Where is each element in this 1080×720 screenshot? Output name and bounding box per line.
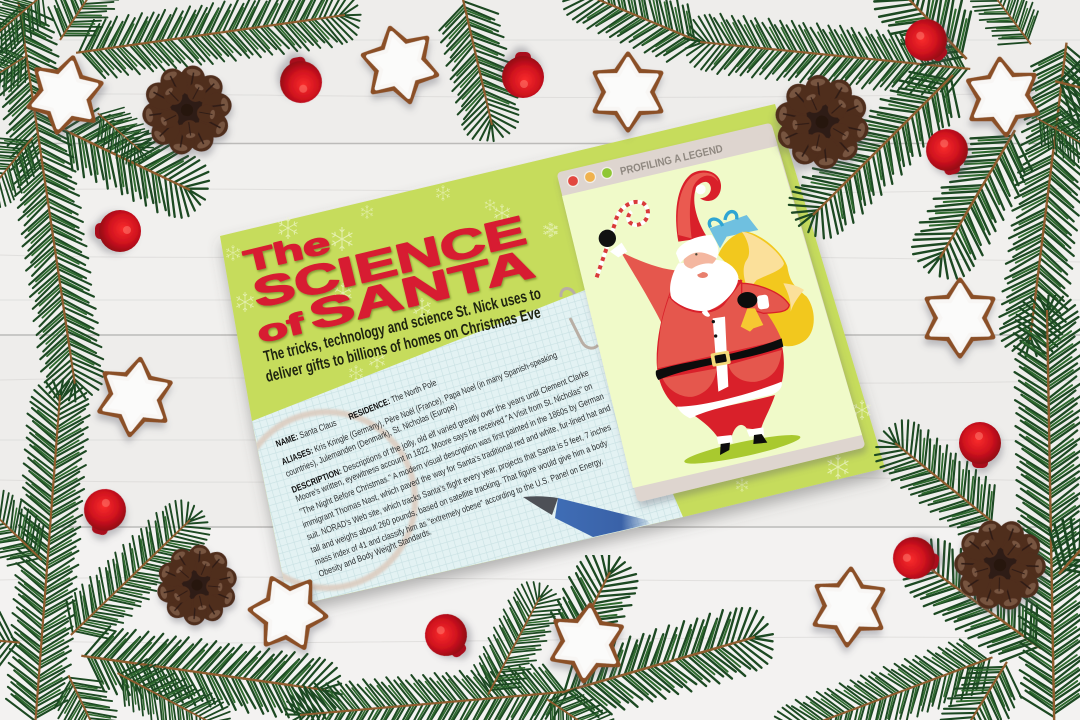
window heading: PROFILING A LEGEND <box>619 143 724 178</box>
profile text block: countries), Julemanden (Denmark), St. Nicholas (Europe) <box>284 401 458 479</box>
title: The <box>241 226 333 279</box>
panel: magazine page card <box>220 104 885 607</box>
window: profiling a legend <box>562 128 862 497</box>
fir branches: bottom left <box>0 370 350 720</box>
subtitle: The tricks, technology and science St. Nick uses to <box>262 285 543 366</box>
fir branches: bottom centre <box>285 555 785 720</box>
profile text block: "The Night Before Christmas." A modern visual description was first painted in the 1860s by German <box>298 391 605 517</box>
green page <box>220 104 885 607</box>
pen <box>523 496 650 537</box>
profile text block: mass index of 41 and classify him as "extremely obese" according to the U.S. Panel on Energy, <box>313 456 604 567</box>
belt and buckle <box>656 338 783 380</box>
cuff and mitten <box>599 230 627 257</box>
title: SCIENCE <box>248 207 530 317</box>
profile text block: NAME: Santa Claus <box>274 417 338 449</box>
coffee ring stain <box>239 412 415 588</box>
paperclip upper part <box>561 288 590 322</box>
profile text block: suit. NORAD's Web site, which tracks Santa's flight every year, projects that Santa is 5 feet, 7 inches <box>305 422 613 542</box>
body <box>657 272 784 418</box>
title: of <box>254 308 308 350</box>
raised arm <box>621 252 683 323</box>
profile text block: DESCRIPTION: Descriptions of the jolly, old elf varied greatly over the years until Clement Clarke <box>290 368 590 495</box>
fir branches: bottom right <box>765 295 1080 720</box>
profile text block: ALIASES: Kris Kringle (Germany), Père Noël (France), Papa Noel (in many Spanish-speaking <box>280 350 558 467</box>
window content area <box>562 146 862 488</box>
profile text block: Obesity and Body Weight Standards. <box>317 527 433 579</box>
subtitle: deliver gifts to billions of homes on Christmas Eve <box>264 304 542 386</box>
ground shadow <box>683 430 802 469</box>
toy sack <box>718 232 814 346</box>
profile text block: immigrant Thomas Nast, which paved the way for Santa's traditional red and white, fur-lined hat and <box>301 403 612 530</box>
paperclip lower part <box>570 318 598 348</box>
red baubles <box>78 10 1001 668</box>
title: SANTA <box>304 240 539 339</box>
profile text block: Moore's written, eyewitness account in 1822. Moore says he received "A Visit from St. Nicholas" on <box>294 381 594 504</box>
beard <box>670 260 742 317</box>
candy cane <box>597 202 648 277</box>
other arm with bell <box>737 283 789 332</box>
profile text block: tall and weighs about 260 pounds, based on satellite tracking. That figure would give him a body <box>309 438 609 555</box>
profile text block <box>274 350 613 579</box>
notepad paper <box>252 290 683 607</box>
gift box <box>709 212 758 248</box>
illustration: Santa Claus <box>597 171 814 469</box>
fir branch: top centre <box>425 0 535 150</box>
trousers and boots <box>695 395 775 455</box>
title <box>241 207 539 350</box>
face <box>682 247 718 278</box>
fir branches: top right <box>555 0 1080 360</box>
window buttons <box>568 168 612 186</box>
snowflake pattern <box>226 185 871 492</box>
window frame <box>562 128 860 497</box>
pine cones <box>133 57 1061 629</box>
profile text block: RESIDENCE: The North Pole <box>347 377 438 422</box>
hat <box>676 171 721 263</box>
fir branches: top left <box>0 0 370 410</box>
